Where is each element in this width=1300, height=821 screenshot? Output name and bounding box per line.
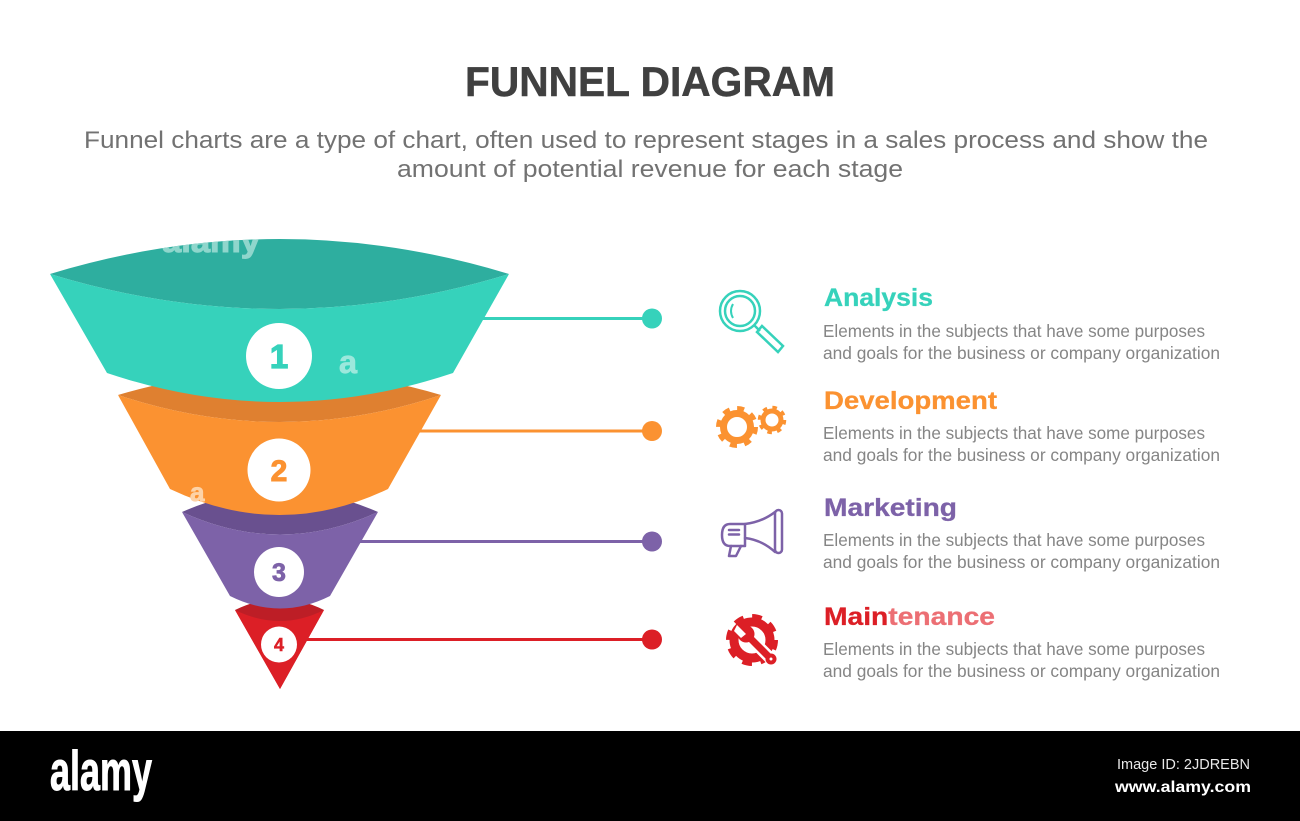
- text block: marketing: Elements in the subjects that have some purposes: [823, 530, 1205, 550]
- icon: gear with wrench: [729, 617, 776, 664]
- funnel segment 1: 1: [270, 338, 288, 375]
- funnel segment 1: [50, 223, 509, 402]
- title: FUNNEL DIAGRAM: [465, 58, 835, 105]
- text block: maintenance: Main tenance: [824, 603, 995, 631]
- funnel segment 2: [118, 371, 441, 515]
- funnel segment 4: 4: [274, 635, 284, 655]
- text block: maintenance: Elements in the subjects that have some purposes: [823, 639, 1205, 659]
- funnel segment 2: 2: [271, 455, 287, 488]
- text block: analysis: Elements in the subjects that have some purposes: [823, 321, 1205, 341]
- footer logo: alamy: [50, 739, 152, 802]
- footer bar: [0, 731, 1300, 821]
- text block: development: [823, 387, 1220, 465]
- icon: gears: [718, 408, 784, 446]
- text block: development: Elements in the subjects that have some purposes: [823, 423, 1205, 443]
- funnel segment 2: a: [190, 477, 205, 507]
- text block: analysis: Analysis: [824, 284, 933, 312]
- funnel segment 1: alamy: [162, 223, 260, 259]
- text block: maintenance: and goals for the business or company organization: [823, 661, 1220, 681]
- text block: analysis: [823, 284, 1220, 363]
- footer image id: Image ID: 2JDREBN: [1117, 756, 1250, 773]
- text block: marketing: Marketing: [824, 494, 957, 522]
- text block: maintenance: [823, 603, 1220, 681]
- text block: marketing: [823, 494, 1220, 572]
- subtitle: [84, 127, 1208, 183]
- funnel segment 1: a: [339, 344, 357, 380]
- text block: analysis: and goals for the business or company organization: [823, 343, 1220, 363]
- subtitle: Funnel charts are a type of chart, often used to represent stages in a sales process and show the: [84, 127, 1208, 154]
- funnel segment 4: [235, 599, 324, 689]
- text block: development: and goals for the business or company organization: [823, 445, 1220, 465]
- text block: development: Development: [824, 387, 998, 415]
- icon: magnifier: [720, 291, 783, 352]
- icon: megaphone: [722, 510, 782, 556]
- connector lines: [300, 308, 662, 650]
- funnel: [50, 223, 509, 689]
- text block: marketing: and goals for the business or company organization: [823, 552, 1220, 572]
- footer website: www.alamy.com: [1114, 779, 1251, 796]
- funnel segment 3: [182, 490, 378, 608]
- funnel segment 3: 3: [272, 559, 286, 587]
- subtitle: amount of potential revenue for each stage: [397, 156, 903, 183]
